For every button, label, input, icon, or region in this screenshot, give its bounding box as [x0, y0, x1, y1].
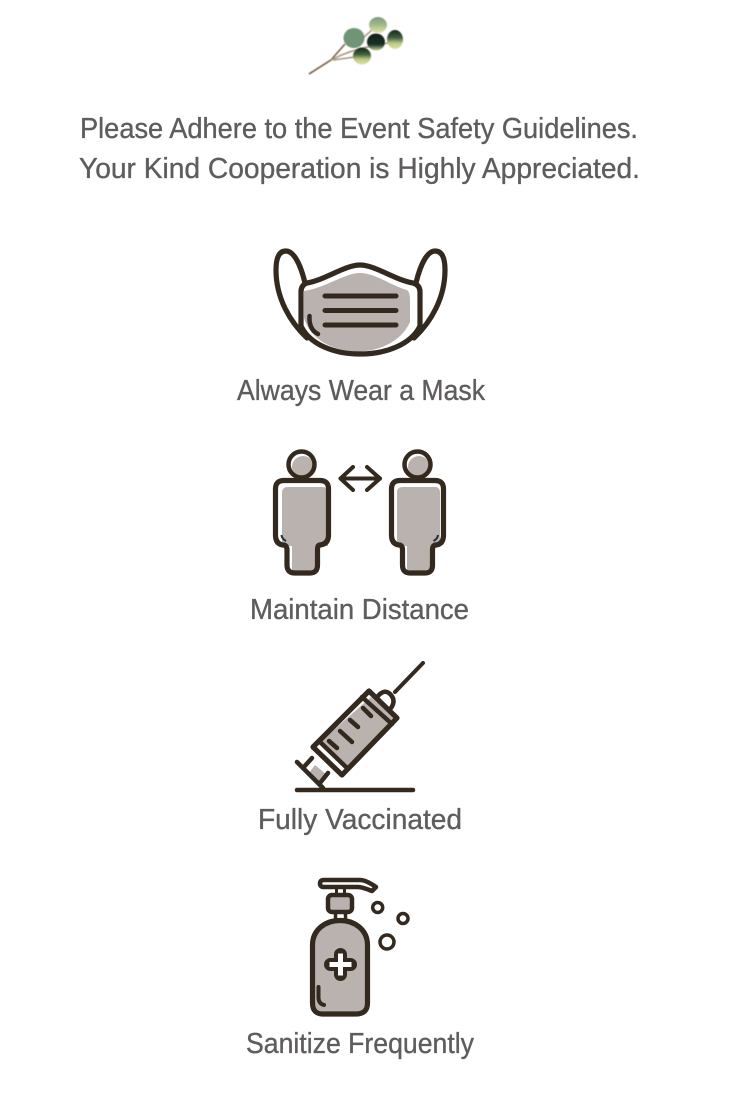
label: maintain distance: Maintain Distance: [250, 594, 469, 626]
heading: [79, 113, 640, 185]
heading: Please Adhere to the Event Safety Guidelines.: [80, 113, 638, 145]
arrow: distance between people: [340, 467, 380, 490]
label: sanitize frequently: Sanitize Frequently: [246, 1028, 475, 1060]
right person: [392, 452, 444, 573]
icon: two people keeping distance: [276, 452, 444, 573]
icon: medical cross: [330, 954, 352, 976]
icon: face mask: [276, 251, 445, 354]
label: fully vaccinated: Fully Vaccinated: [258, 804, 462, 836]
heading: Your Kind Cooperation is Highly Appreciated.: [79, 153, 640, 185]
icon: eucalyptus sprig: [309, 17, 403, 74]
label: always wear a mask: Always Wear a Mask: [237, 375, 486, 407]
icon: syringe: [297, 663, 423, 790]
icon: hand sanitizer bottle: [312, 880, 408, 1014]
left person: [276, 452, 328, 573]
